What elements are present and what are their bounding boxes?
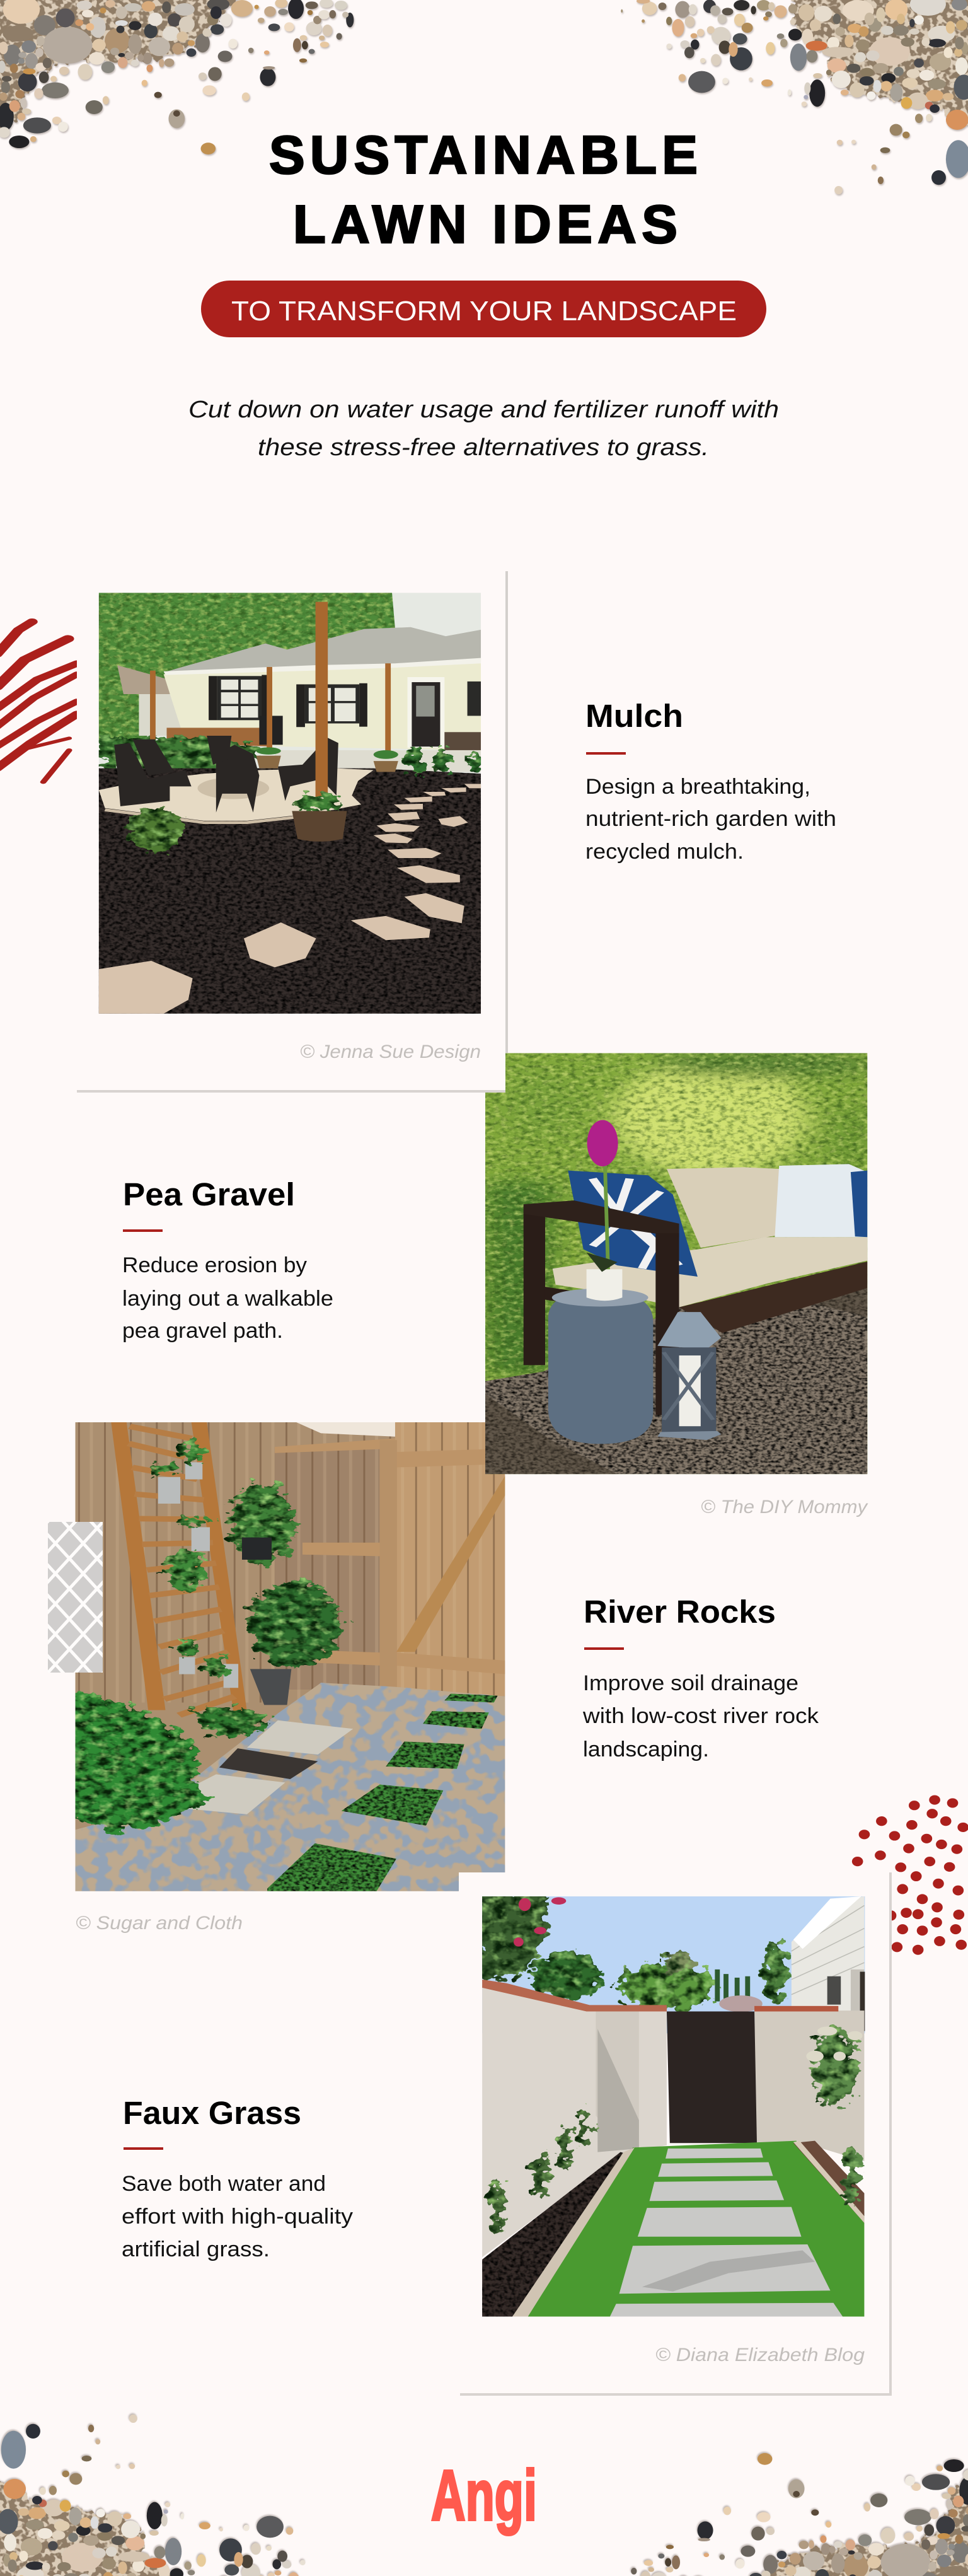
title: [269, 125, 698, 255]
text block: Mulch: Design a breathtaking,: [585, 775, 810, 799]
card background: [459, 1872, 889, 2393]
caption: Sugar and Cloth: © Sugar and Cloth: [76, 1913, 243, 1934]
text block: Pea Gravel: Reduce erosion by: [122, 1253, 307, 1277]
text block: Pea Gravel: laying out a walkable: [122, 1287, 333, 1311]
text block: Faux Grass: [122, 2095, 353, 2261]
text block: Pea Gravel: pea gravel path.: [122, 1319, 283, 1343]
red scribble decoration: [0, 622, 77, 782]
text block: Mulch: [585, 698, 836, 864]
intro text: Cut down on water usage and fertilizer runoff with: [188, 397, 779, 423]
caption: Diana Elizabeth Blog: © Diana Elizabeth Blog: [655, 2345, 865, 2365]
title: SUSTAINABLE: [269, 125, 698, 185]
caption: Jenna Sue Design: © Jenna Sue Design: [300, 1041, 481, 1062]
pebbles: bottom left: [0, 2415, 351, 2576]
card: Mulch photo panel: [77, 571, 505, 1093]
subtitle pill: [201, 281, 766, 337]
text block: Faux Grass: effort with high-quality: [122, 2205, 353, 2229]
text block: River Rocks: Improve soil drainage: [583, 1671, 798, 1695]
text block: Mulch: Mulch: [585, 698, 683, 734]
text block: Pea Gravel: Pea Gravel: [123, 1176, 295, 1212]
text block: River Rocks: with low-cost river rock: [582, 1704, 819, 1728]
text block: Mulch: nutrient-rich garden with: [585, 807, 836, 831]
title: LAWN IDEAS: [293, 195, 677, 255]
subtitle pill: TO TRANSFORM YOUR LANDSCAPE: [231, 296, 737, 327]
text block: Faux Grass: Faux Grass: [123, 2095, 301, 2131]
pebbles: top right: [621, 0, 968, 194]
text block: River Rocks: River Rocks: [584, 1594, 776, 1630]
logo: Angi: Angi: [431, 2456, 537, 2535]
intro text: [188, 397, 779, 461]
photo: faux grass: [475, 1892, 865, 2316]
pebbles: top left: [0, 0, 354, 154]
photo: river rocks: [62, 1422, 505, 1891]
red dots decoration: [852, 1795, 968, 1955]
photo: mulch: [99, 593, 483, 1014]
card shadow: [460, 1872, 892, 2396]
photo: pea gravel: [485, 1052, 877, 1474]
text block: Faux Grass: artificial grass.: [122, 2237, 270, 2261]
text block: River Rocks: landscaping.: [583, 1738, 709, 1761]
card background: [77, 571, 505, 1090]
card 1 right edge shadow: [505, 571, 508, 1053]
text block: River Rocks: [582, 1594, 819, 1761]
pebbles: bottom right: [619, 2453, 968, 2576]
text block: Faux Grass: Save both water and: [122, 2172, 326, 2196]
text block: Pea Gravel: [122, 1176, 333, 1343]
tape decoration: [48, 1522, 103, 1673]
card: Faux Grass photo panel: [459, 1872, 892, 2396]
caption: The DIY Mommy: © The DIY Mommy: [701, 1497, 868, 1517]
card bottom shadow: [77, 1090, 505, 1093]
intro text: these stress-free alternatives to grass.: [258, 434, 709, 461]
text block: Mulch: recycled mulch.: [585, 840, 744, 864]
